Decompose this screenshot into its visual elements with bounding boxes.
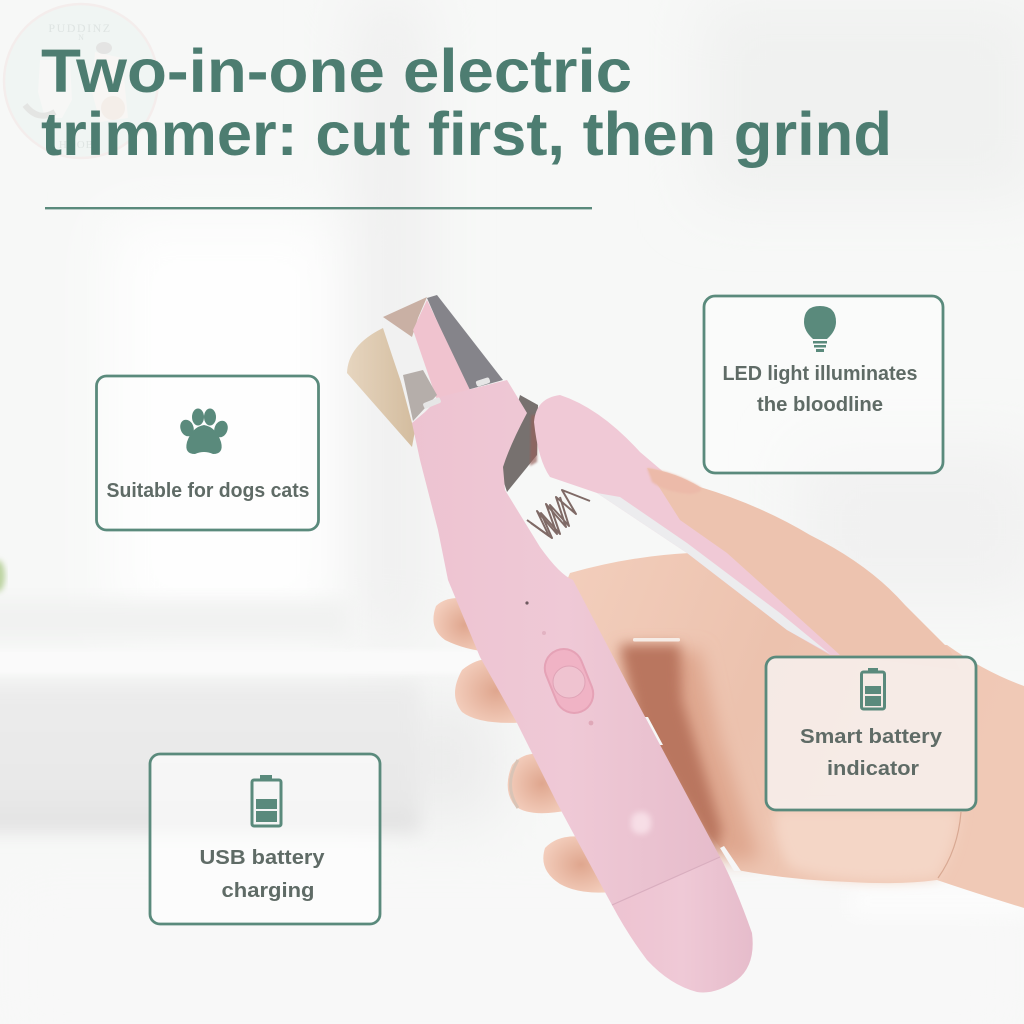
title: Two-in-one electric (41, 37, 632, 105)
spring (527, 490, 590, 538)
slide switch (538, 642, 600, 720)
label: LED light illuminates (722, 362, 918, 385)
finger: middle (455, 659, 530, 723)
white gaps (644, 717, 741, 871)
palm shadow beside trimmer (620, 645, 722, 855)
indicator dots (525, 601, 529, 605)
label: USB battery (200, 846, 325, 869)
disc red reflection (530, 415, 538, 466)
watermark logo: PUDDINZ (48, 21, 112, 35)
inner mechanism (403, 370, 437, 421)
panel: LED light: the bloodline (757, 393, 883, 416)
panel: USB charging: charging (222, 879, 314, 902)
label: Smart battery (800, 725, 943, 748)
upper handle (534, 395, 840, 655)
title divider (45, 207, 592, 209)
label: Suitable for dogs cats (106, 479, 310, 502)
title: trimmer: cut first, then grind (41, 100, 892, 168)
watermark logo: HOOBS (59, 139, 101, 151)
grey wedge (427, 295, 503, 390)
metal blade top (383, 297, 427, 337)
icon: battery (252, 775, 281, 826)
guard tabs (423, 397, 441, 409)
panel: suitable for dogs and cats (96, 376, 318, 530)
palm soft shadow (620, 650, 760, 860)
title (41, 37, 892, 168)
finger: little (543, 836, 612, 893)
watermark logo (4, 4, 158, 158)
steel cutting disc (500, 395, 538, 492)
logo mark (631, 812, 651, 834)
icon: paw (178, 408, 230, 454)
white gap line (633, 638, 680, 642)
icon: light bulb (804, 306, 836, 352)
lower palm highlight (775, 810, 960, 881)
finger: index (433, 598, 490, 652)
trimmer (347, 295, 960, 992)
panel: LED light (704, 296, 943, 473)
thumb nail (647, 468, 701, 494)
hand behind the trimmer (433, 553, 1024, 908)
battery cap (612, 857, 753, 992)
handle white strip (597, 493, 830, 654)
wrist crease (938, 812, 961, 878)
icon: battery (862, 668, 884, 709)
panel: smart battery indicator (766, 657, 976, 810)
main body (412, 380, 720, 905)
thumb (647, 468, 960, 670)
transparent guard (385, 295, 503, 423)
wooden nail stage (347, 328, 416, 447)
panel: USB charging (150, 754, 380, 924)
finger: ring (508, 754, 570, 813)
watermark logo: N (78, 33, 84, 42)
inner pink blade cover (413, 300, 470, 400)
panel: smart battery indicator: indicator (827, 757, 919, 780)
